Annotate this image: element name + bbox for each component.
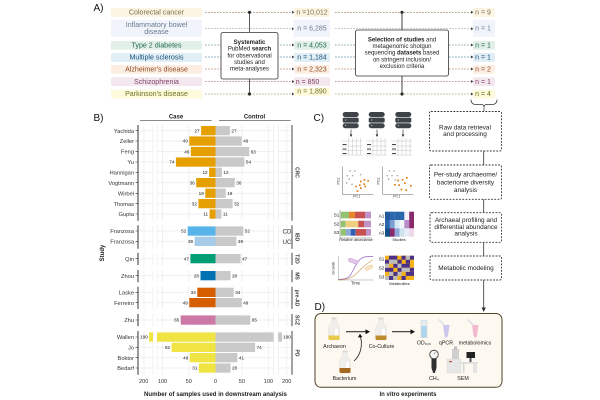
- step: raw data: Raw data retrieval: [439, 124, 491, 131]
- disease: Parkinson's: Parkinson's disease: [125, 90, 188, 98]
- icon: metabolomics tube: [459, 320, 492, 346]
- column headers: [140, 114, 291, 121]
- control value labels: 11: [223, 212, 228, 217]
- strip labels: T2D: [294, 254, 300, 264]
- study labels: Vogtmann: [108, 181, 134, 187]
- chart icon: PCA left: PC2: [336, 177, 340, 185]
- case value labels: 11: [203, 212, 209, 217]
- icon: co-culture bottle: Co-Culture: [369, 344, 394, 350]
- study labels: Jo: [128, 345, 134, 351]
- x axis title: Number of samples used in downstream analysis: [144, 391, 288, 398]
- disease: type 2 diabetes: Type 2 diabetes: [131, 41, 182, 49]
- dashed connectors: [205, 12, 472, 94]
- icon: pressure gauge: CH₄: [429, 376, 439, 382]
- control value labels: 19: [227, 191, 233, 196]
- selected dataset counts: n = 2: [475, 66, 491, 74]
- arrowheads: [292, 11, 474, 95]
- chart icon: relative abundance stacked bars: Relative abundance: [339, 238, 373, 242]
- connector lines: [482, 151, 486, 312]
- x axis tick labels: [139, 379, 291, 385]
- column headers: Control: [244, 114, 265, 120]
- strip labels: MS: [294, 272, 300, 280]
- disease: type 2 diabetes: [111, 41, 202, 50]
- chart icon: PCA right: PC1: [393, 195, 400, 199]
- panel B: sample size chart: [100, 114, 300, 398]
- disease: schizophrenia: Schizophrenia: [134, 78, 179, 86]
- case value labels: 65: [174, 318, 180, 323]
- chart icon: studies heatmap: A3: [379, 230, 385, 236]
- search counts: n = 2,323: [297, 66, 327, 74]
- control value labels: 12: [223, 170, 229, 175]
- chart icon: relative abundance stacked bars: S3: [334, 230, 340, 235]
- search counts: n = 850: [296, 79, 319, 86]
- icon: metabolomics tube: metabolomics: [459, 340, 492, 346]
- x axis tick labels: 100: [264, 379, 273, 385]
- icon: tables: [342, 138, 412, 155]
- icon: databases: [343, 112, 411, 128]
- case value labels: 31: [192, 366, 198, 371]
- control value labels: 74: [257, 345, 262, 350]
- strip labels: SCZ: [294, 315, 300, 325]
- disease: inflammatory bowel disease: [111, 20, 202, 37]
- chart icon: metabolites heatmap: S1: [379, 256, 385, 262]
- study labels: Zhou: [121, 274, 134, 280]
- panel A: search flow: [111, 8, 497, 111]
- case value labels: 19: [199, 191, 204, 196]
- control value labels: 27: [231, 128, 237, 133]
- box: study selection: [356, 30, 448, 76]
- case value labels: 39: [188, 239, 194, 244]
- IBD case bars: [188, 226, 216, 246]
- box: systematic search: studies and: [234, 60, 265, 66]
- control value labels: 63: [251, 149, 256, 154]
- study labels: Zeller: [120, 139, 134, 145]
- control value labels: 52: [245, 229, 250, 234]
- box: systematic search: Systematic: [234, 40, 266, 46]
- control value labels: 28: [232, 273, 238, 278]
- control value labels: 36: [236, 180, 242, 185]
- step: raw data: [430, 112, 502, 151]
- chart icon: PCA left: [336, 167, 373, 199]
- caption: In vitro experiments: [379, 392, 437, 398]
- icon: qPCR tube: [439, 320, 453, 346]
- box: study selection: on stringent inclusion/: [373, 57, 431, 63]
- chart icon: growth curves: [331, 256, 373, 285]
- case value labels: 12: [202, 170, 208, 175]
- icon: co-culture bottle: [369, 318, 394, 350]
- control value labels: 32: [234, 201, 240, 206]
- strip labels: CD: [283, 230, 292, 236]
- disease: Alzheimer's: Alzheimer's disease: [125, 66, 188, 74]
- strip labels: pre-AD: [294, 290, 300, 307]
- control value labels: 34: [235, 290, 241, 295]
- strip labels: IBD: [294, 233, 300, 242]
- study labels: Bedarf: [117, 366, 134, 372]
- disease: multiple sclerosis: [111, 53, 202, 62]
- chart icon: growth curves: Growth: [331, 262, 336, 275]
- panel D: in vitro experiments: [315, 314, 502, 398]
- icon: OD tube: OD₆₀₀: [417, 340, 431, 346]
- icon: bacterium bottle: [333, 350, 357, 382]
- case value labels: 28: [194, 273, 199, 278]
- strip labels: UC: [283, 240, 292, 246]
- control value labels: 190: [283, 335, 291, 340]
- control value labels: 28: [232, 366, 238, 371]
- control value labels: 54: [246, 160, 251, 165]
- control value labels: 49: [243, 300, 249, 305]
- case value labels: 32: [192, 201, 197, 206]
- icon: down arrows: [350, 130, 404, 137]
- study labels: Boktor: [118, 356, 134, 362]
- step: diversity: [430, 165, 502, 199]
- box: systematic search: PubMed search: [228, 47, 272, 53]
- selected dataset counts: [473, 8, 495, 98]
- disease: Parkinson's: [111, 90, 202, 98]
- selected dataset counts: n = 1: [475, 54, 491, 61]
- x axis tick labels: 0: [214, 379, 217, 385]
- case value labels: 47: [184, 256, 189, 261]
- study labels: Wirbel: [118, 191, 134, 197]
- selected dataset counts: n = 4: [475, 91, 491, 98]
- disease: multiple sclerosis: Multiple sclerosis: [129, 53, 184, 61]
- axis and strip rails: [136, 125, 292, 375]
- case value labels: 82: [165, 345, 171, 350]
- experiment frame: [315, 314, 502, 387]
- icon: OD tube: [417, 320, 431, 346]
- study labels: Gupta: [118, 212, 135, 218]
- box: systematic search: [221, 32, 278, 79]
- chart icon: metabolites heatmap: [379, 256, 414, 286]
- step: raw data: and processing: [443, 131, 487, 138]
- disease: Alzheimer's: [111, 65, 202, 74]
- chart icon: PCA left: PC1: [353, 195, 360, 199]
- case value labels: 190: [140, 335, 148, 340]
- strip labels: [283, 167, 300, 357]
- case value labels: 52: [181, 229, 187, 234]
- arrow: co-culture to assays: [392, 329, 415, 334]
- PD case bars: [149, 332, 216, 373]
- study labels: Qin: [125, 257, 134, 263]
- column headers: Case: [169, 114, 184, 120]
- study labels: Feng: [121, 150, 134, 156]
- x axis tick labels: 200: [139, 379, 148, 385]
- icon: SEM microscope: [447, 346, 478, 382]
- x axis tick labels: 100: [158, 379, 167, 385]
- search counts: n = 1,890: [297, 88, 327, 96]
- study labels: Yachida: [114, 129, 135, 135]
- box: systematic search: meta-analyses: [230, 67, 269, 73]
- strip labels: PD: [294, 350, 300, 357]
- chart icon: studies heatmap: A1: [379, 214, 385, 218]
- control value labels: 41: [239, 355, 244, 360]
- study labels: Zhu: [124, 318, 134, 324]
- control value labels: 65: [252, 318, 257, 323]
- chart icon: studies heatmap: Studies: [392, 237, 406, 242]
- chart icon: metabolites heatmap: S2: [379, 266, 385, 270]
- arrow: bacterium to co-culture: [354, 334, 362, 361]
- disease: colorectal cancer: [111, 8, 202, 17]
- study labels: Thomas: [113, 202, 134, 208]
- disease: schizophrenia: [111, 77, 202, 86]
- chart icon: studies heatmap: [379, 212, 414, 242]
- study labels: Franzosa: [110, 239, 135, 245]
- brace to panel C: [471, 100, 497, 111]
- T2D case bar: [190, 254, 216, 263]
- case value labels: 48: [183, 355, 189, 360]
- step: diversity: analysis: [454, 187, 477, 194]
- case value labels: 49: [183, 139, 188, 144]
- chart icon: metabolites heatmap: Metabolites: [389, 281, 410, 286]
- icon: archaeon bottle: [323, 318, 346, 350]
- search counts: n = 4,053: [297, 42, 327, 49]
- control value labels: 49: [243, 139, 249, 144]
- icon: archaeon bottle: Archaeon: [323, 344, 346, 350]
- step: diversity: Per-study archaeome/: [434, 172, 497, 178]
- chart icon: relative abundance stacked bars: [334, 210, 373, 242]
- case value labels: 74: [169, 160, 175, 165]
- search counts: n = 1,184: [297, 54, 327, 61]
- vertical search lines: [248, 11, 403, 95]
- panel label B: B): [94, 113, 104, 124]
- study labels: Ferreiro: [114, 301, 134, 307]
- x axis tick labels: 200: [282, 379, 291, 385]
- study labels: Hannigan: [110, 170, 134, 176]
- panel label C: C): [314, 113, 324, 124]
- chart icon: growth curves: Time: [351, 280, 361, 285]
- chart icon: metabolites heatmap: S3: [379, 274, 385, 280]
- case value labels: 34: [191, 290, 196, 295]
- disease: inflammatory bowel disease: disease: [144, 28, 169, 36]
- case value labels: 36: [190, 180, 195, 185]
- control value labels: 47: [242, 256, 248, 261]
- control bars: [216, 126, 282, 373]
- icon: bacterium bottle: Bacterium: [333, 376, 357, 382]
- chart icon: studies heatmap: A2: [379, 222, 385, 227]
- study labels: Franzosa: [110, 229, 135, 235]
- step: profiling: analysis: [454, 230, 478, 238]
- icon: qPCR tube: qPCR: [439, 340, 453, 346]
- panel label D: D): [314, 302, 325, 313]
- y axis title: Study: [100, 244, 106, 261]
- pre-AD case bars: [189, 288, 216, 307]
- chart icon: relative abundance stacked bars: S1: [334, 212, 340, 218]
- study labels: Laske: [119, 290, 134, 296]
- case value labels: [140, 128, 209, 371]
- study labels: Wallen: [117, 335, 134, 341]
- disease: inflammatory bowel disease: Inflammatory bowel: [126, 21, 188, 29]
- selected dataset counts: n = 1: [475, 26, 491, 32]
- strip labels: CRC: [294, 167, 300, 178]
- search counts: n =10,012: [296, 10, 328, 16]
- box: study selection: metagenomic shotgun: [372, 44, 432, 50]
- step: profiling: differential abundance: [434, 224, 498, 231]
- gridlines: [138, 125, 292, 375]
- x axis tick labels: 50: [186, 379, 192, 385]
- study labels: [108, 129, 135, 372]
- study labels: Yu: [127, 160, 134, 166]
- case value labels: 46: [184, 149, 190, 154]
- icon: pressure gauge: [429, 350, 439, 382]
- MS case bar: [200, 271, 216, 280]
- control value labels: 39: [238, 239, 243, 244]
- search counts: [294, 8, 330, 96]
- disease: colorectal cancer: Colorectal cancer: [129, 8, 185, 16]
- panel C: analysis workflow: [331, 112, 502, 312]
- CRC case bars: [176, 126, 216, 219]
- case value labels: 27: [194, 128, 200, 133]
- selected dataset counts: n = 1: [475, 79, 491, 86]
- box: study selection: Selection of studies and: [368, 37, 436, 43]
- box: systematic search: for observational: [227, 53, 272, 59]
- selected dataset counts: n = 1: [475, 42, 491, 49]
- selected dataset counts: n = 9: [475, 10, 491, 16]
- box: study selection: exclusion criteria: [380, 64, 425, 70]
- arrow: archaeon to co-culture: [346, 329, 370, 334]
- step: profiling: [430, 213, 502, 242]
- case value labels: 49: [183, 300, 188, 305]
- step: modeling: [430, 256, 502, 280]
- panel label A: A): [94, 3, 104, 14]
- SCZ case bar: [181, 315, 216, 325]
- chart icon: relative abundance stacked bars: S2: [334, 222, 340, 226]
- box: study selection: sequencing datasets based: [365, 51, 439, 57]
- control value labels: [223, 128, 291, 371]
- chart icon: PCA right: [377, 167, 413, 199]
- step: profiling: Archaeal profiling and: [435, 217, 498, 224]
- chart icon: PCA right: PC2: [377, 177, 381, 185]
- search counts: n = 6,285: [297, 26, 327, 32]
- step: modeling: Metabolic modeling: [438, 265, 494, 272]
- icon: SEM microscope: SEM: [457, 376, 469, 382]
- x axis tick labels: 50: [239, 379, 245, 385]
- step: diversity: bacteriome diversity: [437, 180, 495, 186]
